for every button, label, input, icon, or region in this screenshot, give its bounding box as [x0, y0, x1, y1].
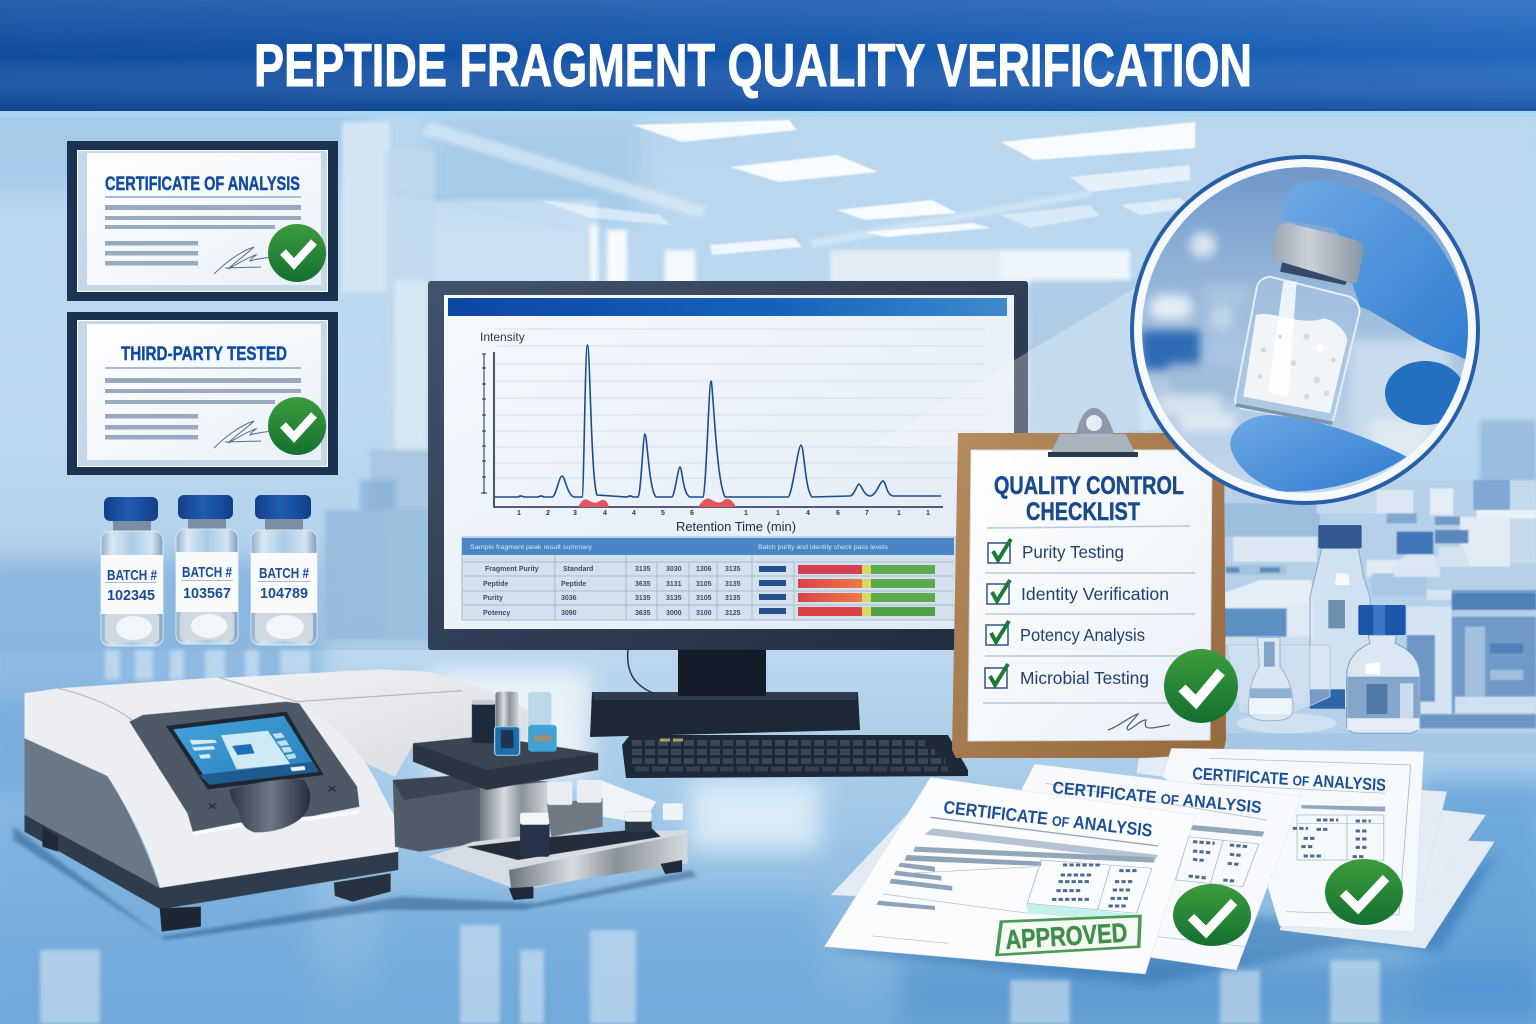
vial: batch 102345: BATCH # — [107, 567, 158, 584]
checklist item: purity testing: Purity Testing — [1022, 542, 1124, 562]
main white body — [25, 677, 398, 888]
back sheets — [831, 757, 1494, 948]
tray vials — [520, 780, 683, 857]
panel marks — [209, 786, 336, 809]
paper stack: certificates — [824, 748, 1500, 985]
signature — [1108, 714, 1170, 730]
clipboard: quality control checklist — [952, 408, 1238, 758]
x axis tick numbers — [517, 510, 930, 517]
instrument shadow — [13, 827, 696, 940]
x axis tick numbers: 6 — [690, 510, 694, 517]
vial: batch 104789 — [251, 495, 317, 645]
control panel bezel — [129, 702, 359, 832]
results table: 3135 — [666, 595, 682, 602]
vial: batch 102345 — [101, 497, 163, 646]
heading: third-party tested: THIRD-PARTY TESTED — [121, 344, 287, 365]
glove bottom finger — [1230, 415, 1407, 492]
text lines — [105, 196, 301, 266]
signature — [214, 421, 272, 448]
results table: 1306 — [696, 566, 712, 573]
results table: 3036 — [561, 595, 577, 602]
heading: certificate of analysis: CERTIFICATE OF ANALYSIS — [105, 174, 300, 195]
screen title bar — [448, 298, 1007, 316]
light beam from vial callout — [872, 282, 1195, 450]
icon: large green check — [1164, 649, 1238, 723]
monitor with chromatogram — [428, 281, 1028, 650]
flask — [1248, 637, 1293, 721]
checklist item: identity verification — [987, 580, 1169, 604]
results table: 3100 — [696, 610, 712, 617]
x axis tick numbers: 1 — [926, 510, 930, 517]
checklist paper — [968, 450, 1212, 741]
beaker and tray — [1227, 645, 1337, 733]
results table: Peptide — [483, 581, 508, 588]
clipboard: quality control checklist: CHECKLIST — [1026, 498, 1140, 526]
x axis tick numbers: 1 — [517, 510, 521, 517]
results table: Standard — [563, 566, 593, 573]
sheet heading: second: CERTIFICATE OF ANALYSIS — [1052, 778, 1262, 817]
x axis tick numbers: 3 — [573, 510, 577, 517]
checklist item: purity testing — [988, 539, 1124, 563]
x axis tick numbers: 6 — [836, 510, 840, 517]
stack shadow — [830, 850, 1500, 985]
x axis tick numbers: 1 — [897, 510, 901, 517]
results table: 3000 — [666, 610, 682, 617]
checklist item: potency analysis: Potency Analysis — [1020, 625, 1145, 645]
results table: 3090 — [561, 610, 577, 617]
vial: batch 104789: 104789 — [260, 585, 308, 602]
callout: magnified vial — [1130, 155, 1480, 505]
top plate — [413, 736, 598, 790]
signature — [214, 247, 272, 274]
x axis tick numbers: 4 — [603, 510, 607, 517]
second sheet — [1020, 764, 1301, 970]
sample vials on plate — [472, 692, 557, 755]
results table: Batch purity and identity check pass levels — [758, 544, 889, 551]
x axis tick numbers: 4 — [632, 510, 636, 517]
front sheet — [824, 777, 1195, 974]
x axis tick numbers: 5 — [661, 510, 665, 517]
icon: green check — [268, 397, 326, 455]
results table: Sample fragment peak result summary — [470, 544, 593, 551]
panel: certificate of analysis card — [67, 141, 338, 301]
vial: batch 103567: 103567 — [183, 585, 231, 602]
keyboard — [622, 735, 968, 778]
axis label: retention time: Retention Time (min) — [676, 520, 796, 534]
sheet heading: front: CERTIFICATE OF ANALYSIS — [943, 797, 1153, 841]
glove third finger — [1385, 361, 1465, 425]
results table: 3125 — [725, 610, 741, 617]
results table: 3635 — [635, 610, 651, 617]
tall glass bottle — [1310, 525, 1370, 709]
results table — [462, 537, 956, 620]
checklist item: microbial testing: Microbial Testing — [1020, 668, 1149, 688]
icon: green check on third sheet — [1325, 859, 1403, 925]
rear housing — [214, 669, 528, 777]
x axis tick numbers: 4 — [806, 510, 810, 517]
results table: 3131 — [666, 581, 682, 588]
vial: batch 103567 — [176, 495, 238, 644]
results table: 3135 — [725, 595, 741, 602]
chart gridlines — [495, 329, 985, 478]
approved stamp box — [997, 916, 1140, 955]
x axis tick numbers: 1 — [744, 510, 748, 517]
title banner — [0, 0, 1536, 117]
chromatogram red areas — [578, 499, 736, 507]
sheet heading: third: CERTIFICATE OF ANALYSIS — [1192, 764, 1387, 795]
monitor stand — [590, 648, 860, 737]
capped bottle — [1347, 605, 1420, 733]
autosampler lower block — [393, 775, 549, 852]
blurred lab background — [1140, 232, 1450, 480]
axis label: intensity: Intensity — [480, 330, 525, 344]
chart axes — [481, 352, 943, 507]
vial: batch 102345: 102345 — [107, 587, 155, 604]
foreground glassware — [1227, 525, 1420, 733]
checklist item: identity verification: Identity Verification — [1021, 584, 1169, 604]
ceiling lights — [540, 120, 1195, 255]
results table: Purity — [483, 595, 503, 602]
results table: 3635 — [635, 581, 651, 588]
checklist item: microbial testing — [985, 664, 1149, 688]
top surface seams — [58, 677, 297, 722]
right-side blurred shelving — [1223, 480, 1536, 753]
results table: 3030 — [666, 566, 682, 573]
checklist item: potency analysis — [986, 621, 1145, 645]
vial: batch 103567: BATCH # — [182, 564, 233, 581]
results table: 3135 — [635, 595, 651, 602]
touch screen — [166, 712, 324, 789]
heading: quality control checklist: QUALITY CONTROL — [994, 472, 1184, 500]
approved stamp text: APPROVED — [1005, 918, 1128, 955]
results table: 3135 — [725, 581, 741, 588]
third sheet — [1163, 748, 1424, 932]
glove top finger — [1283, 181, 1473, 363]
results table: Potency — [483, 610, 510, 617]
x axis tick numbers: 7 — [865, 510, 869, 517]
grey side panel — [25, 738, 160, 888]
panel: third-party tested card — [67, 312, 338, 475]
results table: 3105 — [696, 581, 712, 588]
status bars — [798, 565, 935, 616]
results table: 3105 — [696, 595, 712, 602]
results table: 3135 — [725, 566, 741, 573]
x axis tick numbers: 2 — [546, 510, 550, 517]
floor reflections — [40, 650, 1380, 1024]
spectrometer instrument — [13, 669, 696, 940]
icon: green check on second sheet — [1173, 884, 1251, 946]
results table: Fragment Purity — [485, 566, 539, 573]
panel dial — [230, 779, 310, 832]
autosampler tray — [429, 830, 687, 890]
glass vial — [1235, 223, 1364, 425]
x axis tick numbers: 1 — [776, 510, 780, 517]
pale wall structure — [325, 122, 1536, 640]
results table: 3135 — [635, 566, 651, 573]
vial: batch 104789: BATCH # — [259, 565, 310, 582]
text lines — [105, 367, 301, 440]
dark base — [25, 815, 398, 909]
results table: Peptide — [561, 581, 586, 588]
icon: green check — [268, 224, 326, 282]
metal clip — [1048, 408, 1138, 457]
chromatogram trace — [495, 345, 941, 497]
